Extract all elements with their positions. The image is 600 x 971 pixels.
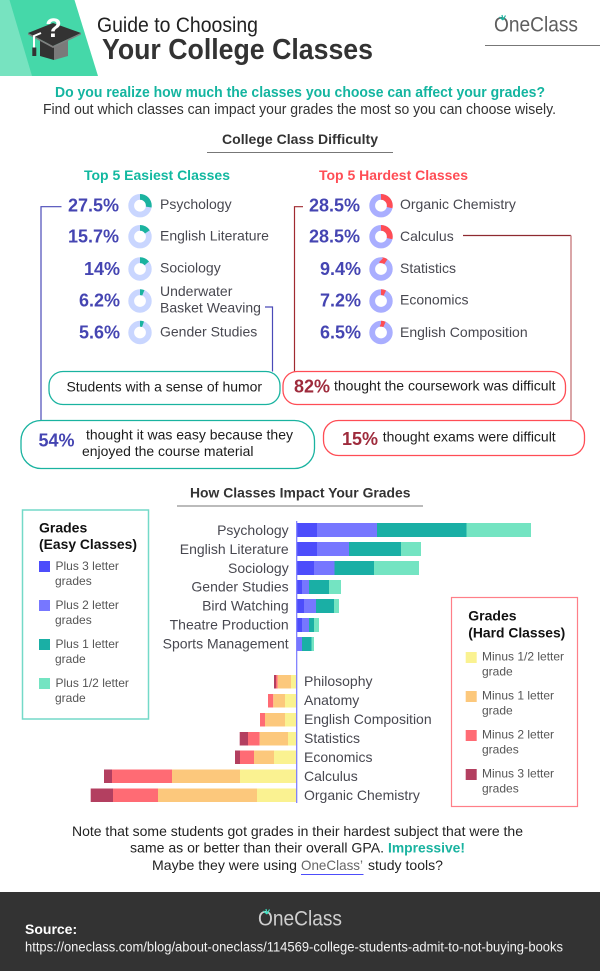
row: Underwater Basket Weaving: Underwater (160, 283, 233, 299)
easy class labels: English Literature (180, 541, 289, 557)
hard class labels: Organic Chemistry (304, 787, 420, 803)
panel: easiest classes (68, 167, 269, 342)
row: English Literature: 15.7% (68, 226, 119, 246)
legend: easy classes: Plus 2 letter (56, 598, 119, 612)
hard class labels: English Composition (304, 711, 432, 727)
callout: sense of humor (49, 372, 280, 404)
legend: hard classes: grades (482, 782, 519, 796)
row: Economics (320, 291, 468, 311)
easy class labels: Psychology (217, 522, 289, 538)
title: Your College Classes (102, 34, 373, 66)
source text (25, 921, 563, 955)
legend: hard classes: Grades (468, 608, 517, 624)
legend: easy classes: grades (55, 613, 92, 627)
callout: 54 percent easy (21, 420, 314, 468)
row: Statistics: Statistics (400, 260, 456, 276)
row: Gender Studies: Gender Studies (160, 324, 257, 340)
hard class bars (91, 675, 296, 802)
header banner (0, 0, 98, 76)
row: English Composition (320, 322, 528, 342)
intro text: Do you realize how much the classes you choose can affect your grades? (55, 85, 545, 101)
legend: easy classes: Plus 1/2 letter (56, 676, 129, 690)
legend: hard classes: Minus 1/2 letter (482, 650, 564, 664)
row: Gender Studies: 5.6% (79, 322, 120, 342)
hard class labels: Philosophy (304, 673, 372, 689)
row: Calculus: Calculus (400, 228, 454, 244)
row: Underwater Basket Weaving (79, 283, 261, 316)
callout: 82 percent coursework: thought the coursework was difficult (334, 378, 556, 394)
callout: 15 percent exams: 15% (342, 429, 378, 449)
row: Sociology (84, 259, 221, 279)
row: Psychology: Psychology (160, 196, 232, 212)
title (97, 14, 373, 66)
legend: hard classes: Minus 2 letter (482, 728, 554, 742)
footer (0, 892, 600, 971)
closing note (72, 823, 523, 874)
legend: hard classes: grades (482, 743, 519, 757)
row: Statistics: 9.4% (320, 259, 361, 279)
closing note: Impressive! (388, 840, 465, 856)
heading: Top 5 Hardest Classes: Top 5 Hardest Classes (319, 167, 468, 183)
row: English Composition: 6.5% (320, 322, 361, 342)
intro text (43, 85, 556, 118)
easy class labels: Theatre Production (170, 617, 289, 633)
legend: hard classes: (Hard Classes) (468, 625, 565, 641)
legend: easy classes: grade (55, 652, 86, 666)
row: Calculus: 28.5% (309, 226, 360, 246)
panel: hardest classes (309, 167, 528, 342)
source text: Source: (25, 921, 77, 937)
row: Underwater Basket Weaving: 6.2% (79, 291, 120, 311)
easy class labels: Sociology (228, 560, 289, 576)
hard class labels: Economics (304, 749, 372, 765)
easy class labels: Gender Studies (191, 579, 289, 595)
legend: easy classes: grades (55, 574, 92, 588)
row: Underwater Basket Weaving: Basket Weaving (160, 300, 261, 316)
easy class labels: Sports Management (163, 636, 289, 652)
heading: College Class Difficulty: College Class Difficulty (222, 131, 378, 147)
row: Economics: 7.2% (320, 291, 361, 311)
row: Calculus (309, 226, 454, 246)
legend: easy classes: (Easy Classes) (39, 536, 137, 552)
legend: easy classes (22, 510, 148, 719)
title: Guide to Choosing (97, 14, 258, 37)
row: Organic Chemistry: 28.5% (309, 196, 360, 216)
heading: How Classes Impact Your Grades: How Classes Impact Your Grades (190, 484, 411, 500)
closing note: OneClass’ (301, 857, 363, 873)
closing note: Maybe they were using (152, 857, 297, 873)
callout: 82 percent coursework: 82% (294, 377, 330, 397)
row: Sociology: 14% (84, 259, 120, 279)
row: Psychology (68, 196, 232, 216)
row: English Literature: English Literature (160, 228, 269, 244)
legend: hard classes: Minus 1 letter (482, 689, 554, 703)
callout: 15 percent exams (324, 420, 584, 456)
legend: easy classes: Plus 1 letter (56, 637, 119, 651)
row: Sociology: Sociology (160, 260, 221, 276)
callout: sense of humor: Students with a sense of humor (66, 379, 262, 395)
row: Psychology: 27.5% (68, 196, 119, 216)
legend: easy classes: Grades (39, 519, 87, 535)
connector lines (41, 207, 571, 420)
logo: OneClass top (485, 14, 600, 46)
row: English Composition: English Composition (400, 324, 528, 340)
callout: 54 percent easy: enjoyed the course material (82, 443, 254, 459)
closing note: study tools? (368, 857, 443, 873)
source text: https://oneclass.com/blog/about-oneclass/114569-college-students-admit-to-not-buying-books (25, 940, 563, 955)
intro text: Find out which classes can impact your grades the most so you can choose wisely. (43, 102, 556, 118)
legend: easy classes: grade (55, 691, 86, 705)
row: Statistics (320, 259, 456, 279)
easy class labels (163, 522, 289, 652)
heading: Top 5 Easiest Classes: Top 5 Easiest Classes (84, 167, 230, 183)
callout: 54 percent easy: thought it was easy because they (86, 426, 293, 442)
closing note: Note that some students got grades in their hardest subject that were the (72, 823, 523, 839)
closing note: same as or better than their overall GPA. (130, 840, 384, 856)
legend: hard classes: grade (482, 704, 513, 718)
icon: graduation cap with question mark: ? (45, 13, 62, 43)
callout: 82 percent coursework (283, 372, 566, 404)
bar chart: grade impact (91, 521, 531, 803)
hard class labels (304, 673, 432, 803)
row: Gender Studies (79, 322, 257, 342)
hard class labels: Anatomy (304, 692, 359, 708)
legend: easy classes: Plus 3 letter (56, 559, 119, 573)
legend: hard classes (452, 598, 578, 806)
row: Organic Chemistry: Organic Chemistry (400, 196, 516, 212)
row: Economics: Economics (400, 292, 468, 308)
hard class labels: Calculus (304, 768, 358, 784)
logo: OneClass top: OneClass (494, 14, 578, 36)
callout: 15 percent exams: thought exams were difficult (383, 429, 556, 445)
easy class labels: Bird Watching (202, 598, 289, 614)
easy class bars (297, 523, 531, 651)
callout: 54 percent easy: 54% (38, 431, 74, 451)
hard class labels: Statistics (304, 730, 360, 746)
row: English Literature (68, 226, 269, 246)
logo: OneClass footer: OneClass (258, 908, 342, 931)
legend: hard classes: grade (482, 665, 513, 679)
legend: hard classes: Minus 3 letter (482, 767, 554, 781)
row: Organic Chemistry (309, 196, 516, 216)
